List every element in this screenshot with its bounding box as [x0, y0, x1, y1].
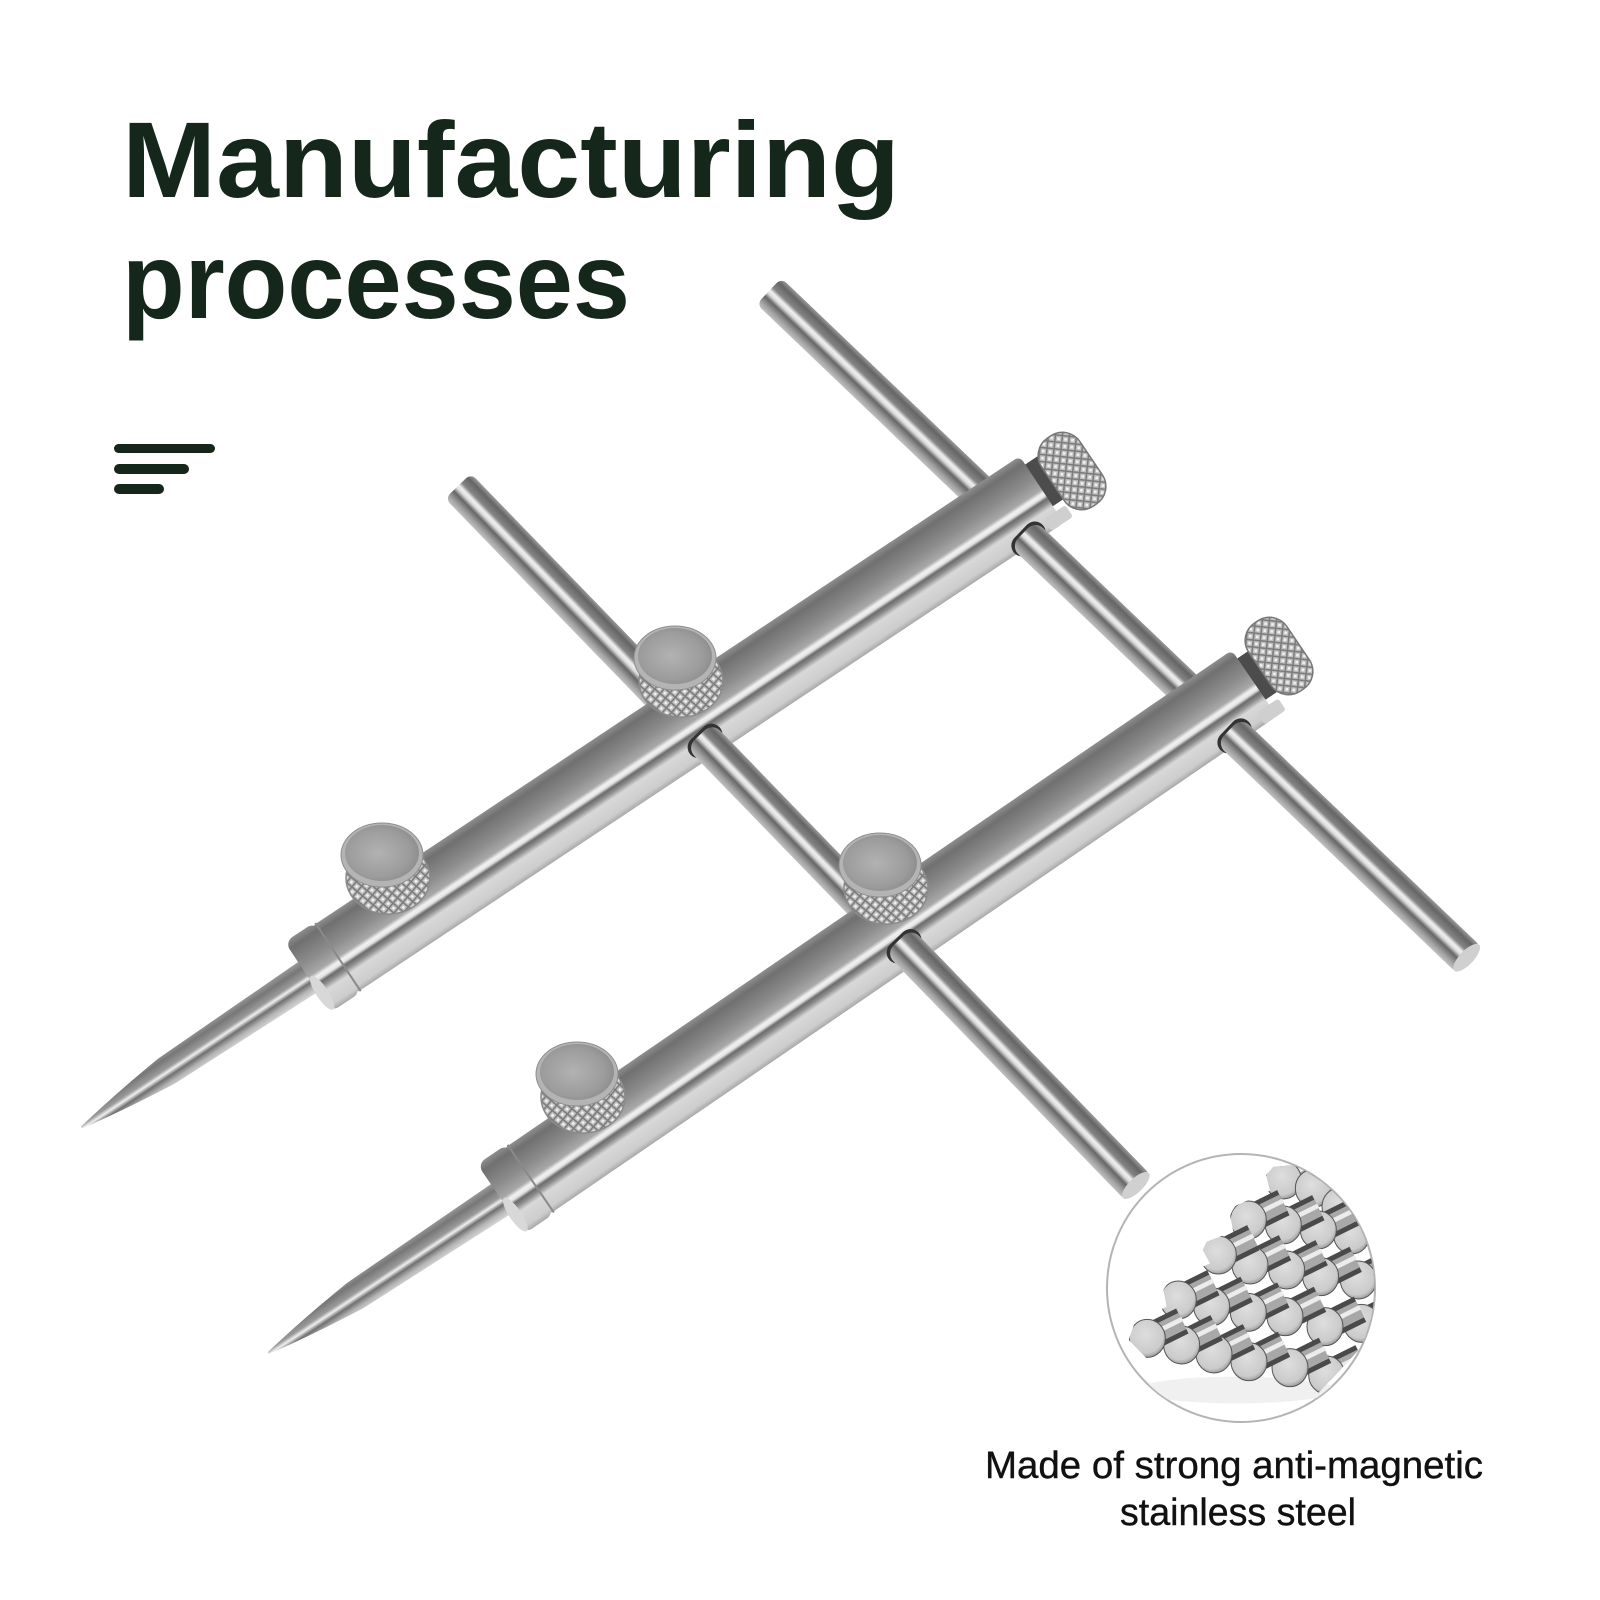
- knob: lower barrel left screw: [536, 1042, 625, 1133]
- rod: lower long cross rod: [445, 473, 1154, 1203]
- knob: upper barrel left screw: [341, 823, 430, 914]
- knob: lower barrel right screw: [839, 833, 928, 924]
- stack of steel rods: [1129, 1166, 1374, 1393]
- icon: decorative three-bar menu mark: [114, 444, 215, 494]
- knob: upper barrel knurled end cap: [1030, 424, 1114, 518]
- arm: upper barrel with pointed tip: [58, 446, 1078, 1163]
- rod: upper long cross rod: [757, 278, 1484, 976]
- caption: stainless steel: [1120, 1492, 1356, 1534]
- product: spanner wrench tool pair: [58, 278, 1484, 1391]
- knob: upper barrel right screw: [634, 626, 723, 717]
- title: processes: [122, 220, 630, 341]
- caption: Made of strong anti-magnetic: [985, 1445, 1483, 1487]
- caption: [985, 1445, 1483, 1534]
- title: [122, 99, 900, 341]
- arm: lower barrel with pointed tip: [247, 640, 1290, 1391]
- title: Manufacturing: [122, 99, 900, 220]
- rod exits: rods passing out of the barrel slots: [683, 517, 1293, 1005]
- knob: lower barrel knurled end cap: [1237, 609, 1321, 703]
- callout: circular material close-up: [1107, 1154, 1397, 1422]
